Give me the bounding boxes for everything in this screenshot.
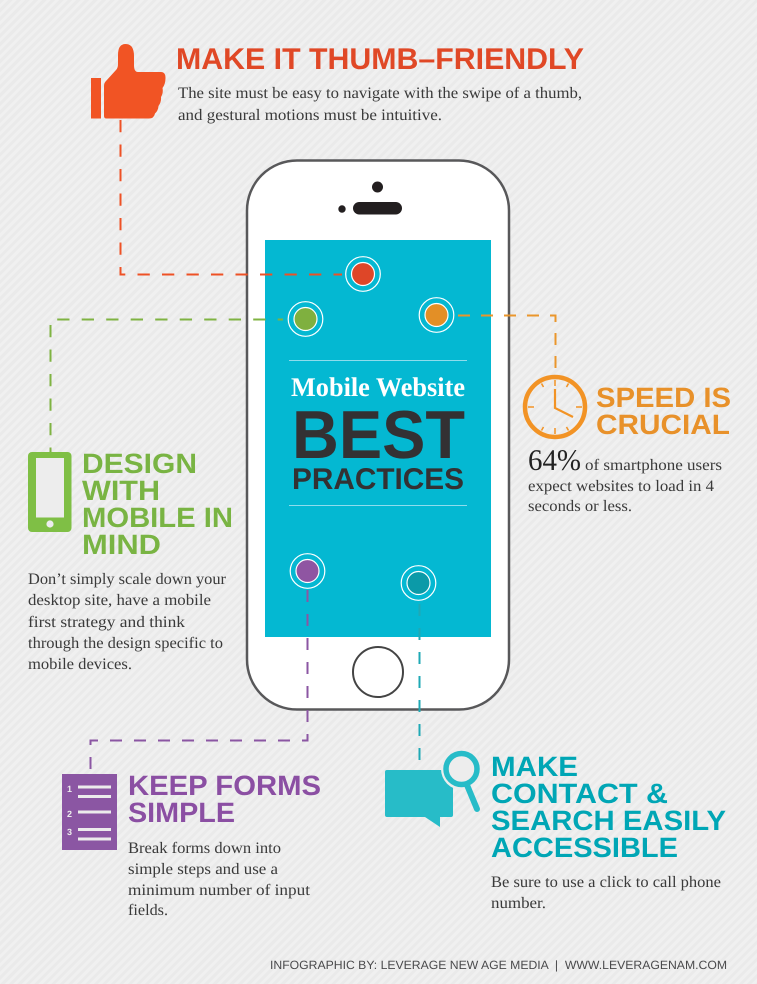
text: design: through the design specific to bbox=[28, 635, 223, 652]
icon: chat bubble and magnifier bbox=[385, 748, 483, 827]
heading: contact bbox=[491, 751, 726, 863]
heading: contact: CONTACT & bbox=[491, 778, 668, 809]
text: thumb-friendly: and gestural motions must be intuitive. bbox=[178, 107, 442, 124]
text: speed: of smartphone users bbox=[585, 457, 722, 474]
heading: forms: KEEP FORMS bbox=[128, 770, 321, 801]
heading: design: DESIGN bbox=[82, 448, 197, 479]
text: forms: fields. bbox=[128, 902, 168, 919]
heading: design bbox=[82, 448, 233, 560]
heading: forms bbox=[128, 770, 321, 828]
screen title: Mobile Website bbox=[291, 372, 465, 402]
connector: thumb bbox=[120, 120, 342, 274]
heading: speed: CRUCIAL bbox=[596, 409, 730, 440]
text: speed: 64% bbox=[528, 444, 581, 477]
heading: contact: ACCESSIBLE bbox=[491, 832, 678, 863]
text: thumb-friendly: The site must be easy to navigate with the swipe of a thumb, bbox=[178, 85, 582, 102]
phone speaker bbox=[353, 202, 402, 214]
icon: mobile phone bbox=[28, 452, 72, 532]
phone camera bbox=[372, 182, 383, 192]
icon: numbered form bbox=[62, 774, 117, 850]
text: forms: Break forms down into bbox=[128, 840, 281, 857]
phone sensor bbox=[338, 205, 346, 213]
heading: design: WITH bbox=[82, 475, 160, 506]
hotspot: purple bbox=[290, 554, 325, 588]
text: speed: seconds or less. bbox=[528, 498, 632, 515]
text: design: desktop site, have a mobile bbox=[28, 592, 211, 609]
heading: speed: SPEED IS bbox=[596, 382, 731, 413]
screen title: PRACTICES bbox=[292, 463, 464, 496]
heading: contact: SEARCH EASILY bbox=[491, 805, 726, 836]
connector: design bbox=[50, 320, 283, 452]
hotspot: red bbox=[346, 257, 380, 291]
phone bbox=[247, 160, 509, 710]
text: contact: number. bbox=[491, 895, 546, 912]
text: forms: minimum number of input bbox=[128, 882, 311, 899]
connector: forms bbox=[90, 590, 308, 775]
text: design: Don’t simply scale down your bbox=[28, 571, 227, 588]
text: contact bbox=[491, 874, 721, 912]
screen title bbox=[289, 360, 467, 506]
text: design: mobile devices. bbox=[28, 656, 132, 673]
phone home button bbox=[353, 647, 403, 697]
hotspot: green bbox=[288, 302, 323, 336]
heading: design: MIND bbox=[82, 529, 161, 560]
heading: speed bbox=[596, 382, 731, 440]
text: speed: expect websites to load in 4 bbox=[528, 478, 714, 495]
connector: speed bbox=[458, 316, 556, 376]
icon: clock bbox=[525, 377, 585, 437]
icon: numbered form: 3 bbox=[67, 827, 72, 837]
icon: numbered form: 1 bbox=[67, 784, 72, 794]
text: forms: simple steps and use a bbox=[128, 861, 278, 878]
text: design: first strategy and think bbox=[28, 614, 185, 631]
connector: contact bbox=[418, 604, 420, 762]
footer credit: INFOGRAPHIC BY: LEVERAGE NEW AGE MEDIA | WWW.LEVERAGENAM.COM bbox=[270, 958, 727, 972]
heading: design: MOBILE IN bbox=[82, 502, 233, 533]
heading: contact: MAKE bbox=[491, 751, 578, 782]
heading: forms: SIMPLE bbox=[128, 797, 235, 828]
icon: numbered form: 2 bbox=[67, 809, 72, 819]
text: contact: Be sure to use a click to call phone bbox=[491, 874, 721, 891]
hotspot: teal bbox=[401, 566, 436, 600]
heading: thumb-friendly: MAKE IT THUMB–FRIENDLY bbox=[176, 43, 584, 76]
screen title: BEST bbox=[292, 397, 465, 473]
text: thumb-friendly bbox=[178, 85, 582, 124]
icon: thumbs up bbox=[91, 44, 166, 118]
phone screen bbox=[265, 240, 491, 637]
text: forms bbox=[128, 840, 311, 919]
text: design bbox=[28, 571, 227, 673]
hotspot: orange bbox=[419, 298, 454, 332]
text: speed bbox=[528, 444, 722, 515]
